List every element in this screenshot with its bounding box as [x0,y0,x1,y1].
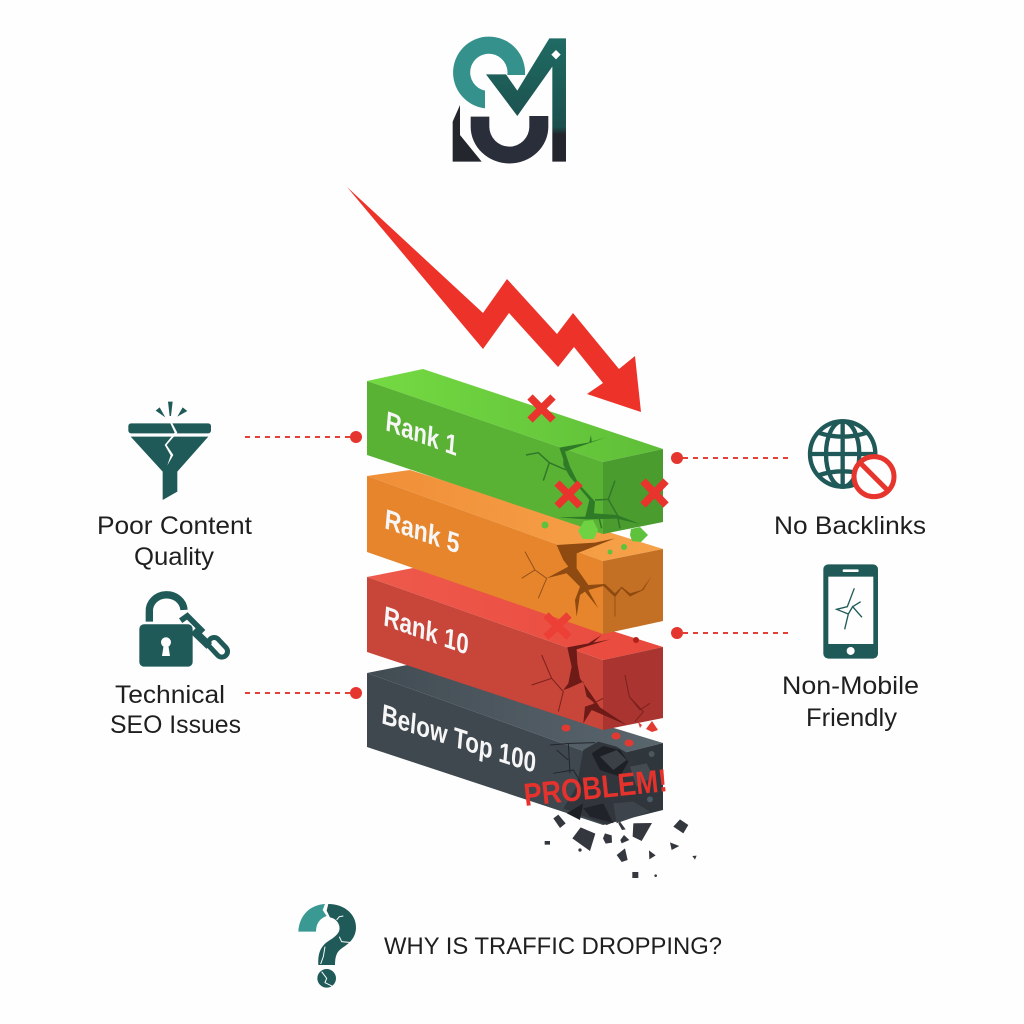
icon: cracked question mark [298,904,356,988]
logo [453,37,566,163]
x mark on front face [557,483,580,506]
text: Technical SEO Issues [110,681,241,739]
right face [603,743,663,825]
top face [367,369,663,462]
impact crater [550,742,663,825]
text: Poor Content Quality: Poor Content [97,512,252,540]
x mark on rank 10 [546,615,569,637]
green debris [542,522,648,554]
x mark on top face [530,397,553,420]
text: Non-Mobile Friendly: Non-Mobile [782,672,919,700]
green chunk [578,520,598,539]
connector: content [245,431,362,443]
front face [367,577,603,730]
PROBLEM label: PROBLEM! [522,762,669,813]
label: Rank 5: Rank 5 [383,503,461,560]
text: Technical SEO Issues: Technical [115,681,225,709]
logo U [471,116,548,163]
label: Rank 10: Rank 10 [382,600,470,661]
right face [603,449,663,534]
right face [603,647,663,730]
text: Poor Content Quality: Quality [134,543,215,571]
block: rank 5 [367,470,663,634]
cracks [532,635,650,725]
red debris [562,721,658,746]
logo left foot [453,105,482,162]
text: why is traffic dropping: WHY IS TRAFFIC DROPPING? [384,933,722,960]
connector: backlinks [671,452,790,464]
top face [367,665,663,758]
label: Rank 1: Rank 1 [384,405,459,462]
text: Non-Mobile Friendly: Friendly [806,704,898,732]
icon: padlock with broken chain [139,595,230,667]
top face [367,470,663,561]
text: Poor Content Quality [97,512,252,571]
connector: mobile [671,627,790,639]
icon: globe with prohibition sign [810,421,894,497]
red X marks [530,397,666,637]
cracks [522,538,652,617]
logo check and M [486,38,566,162]
text: No Backlinks: No Backlinks [774,512,926,540]
icon: cracked funnel [128,402,211,500]
icon: smartphone with cracked screen [823,564,878,659]
block: rank 1 [367,369,663,539]
top face [367,568,663,660]
dark speck [633,637,639,643]
text: Non-Mobile Friendly [782,672,919,732]
block: rank 10 [367,568,663,730]
label: Below Top 100: Below Top 100 [380,698,537,779]
falling red arrow [347,187,641,412]
text: Technical SEO Issues: SEO Issues [110,711,241,739]
connector: technical [245,687,362,699]
x mark on right face [643,481,666,505]
right face [603,549,663,634]
front face [367,381,603,534]
rubble [545,815,697,878]
front face [367,673,603,825]
logo ring [453,37,525,108]
logo diamond [551,50,561,59]
block: below top 100 [367,665,663,825]
front face [367,476,603,634]
cracks [526,435,640,528]
